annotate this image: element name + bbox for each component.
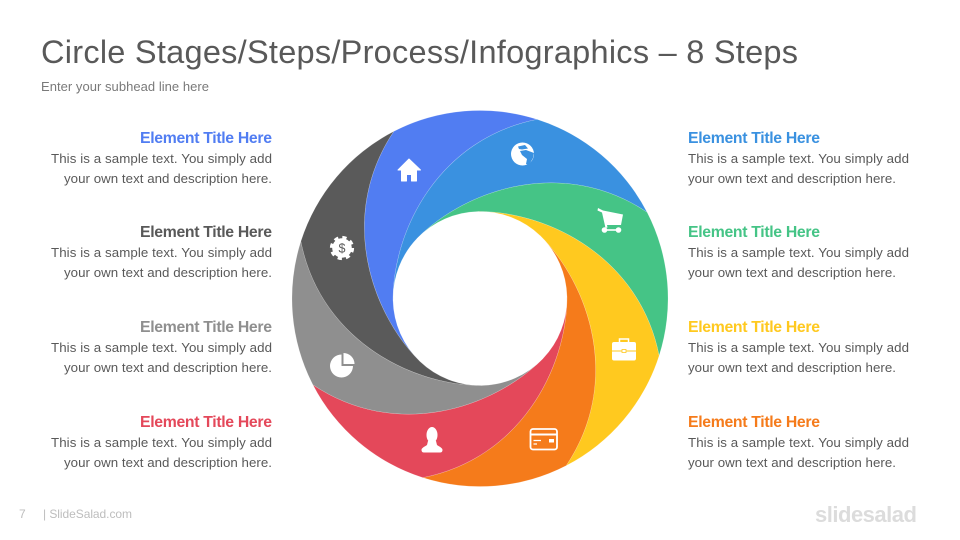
right item 1: your own text and description here. — [688, 171, 896, 186]
segment: gray — [292, 241, 543, 414]
icon: gear with dollar — [332, 238, 352, 258]
left item 1: This is a sample text. You simply add — [51, 151, 272, 166]
left item 3: This is a sample text. You simply add — [51, 340, 272, 355]
left item 1: Element Title Here — [140, 130, 272, 147]
segment: blue — [364, 110, 537, 361]
segment: green — [417, 183, 668, 356]
segment: light blue — [354, 84, 653, 383]
right item 3 — [688, 319, 909, 375]
icon: shopping cart — [598, 208, 623, 233]
left item 2: your own text and description here. — [64, 265, 272, 280]
left item 4: your own text and description here. — [64, 455, 272, 470]
icon: pie chart — [330, 353, 354, 378]
subhead: Enter your subhead line here — [41, 79, 209, 94]
right item 2: Element Title Here — [688, 224, 820, 241]
left item 4: This is a sample text. You simply add — [51, 435, 272, 450]
right item 1 — [688, 130, 909, 186]
page number: 7 — [19, 507, 26, 521]
right item 1: Element Title Here — [688, 130, 820, 147]
right item 3: This is a sample text. You simply add — [688, 340, 909, 355]
segment: red — [307, 214, 606, 513]
left item 1 — [51, 130, 272, 186]
left item 2: Element Title Here — [140, 224, 272, 241]
left item 3 — [51, 319, 272, 375]
title: Circle Stages/Steps/Process/Infographics – 8 Steps — [41, 34, 798, 70]
left item 4: Element Title Here — [140, 414, 272, 431]
segment: dark gray — [265, 125, 565, 425]
icon: gear with dollar: $ — [339, 242, 346, 256]
left item 4 — [51, 414, 272, 470]
icon: briefcase — [612, 339, 636, 360]
right item 2 — [688, 224, 909, 280]
segment: yellow — [395, 172, 695, 472]
circular diagram — [265, 84, 695, 513]
right item 4: This is a sample text. You simply add — [688, 435, 909, 450]
right item 3: your own text and description here. — [688, 360, 896, 375]
icon: user — [422, 427, 442, 452]
segment: orange — [423, 236, 596, 487]
left item 3: your own text and description here. — [64, 360, 272, 375]
right item 2: This is a sample text. You simply add — [688, 245, 909, 260]
right item 2: your own text and description here. — [688, 265, 896, 280]
right item 1: This is a sample text. You simply add — [688, 151, 909, 166]
right item 4: your own text and description here. — [688, 455, 896, 470]
right item 3: Element Title Here — [688, 319, 820, 336]
left item 1: your own text and description here. — [64, 171, 272, 186]
right item 4 — [688, 414, 909, 470]
icon: home — [398, 159, 420, 181]
left item 2: This is a sample text. You simply add — [51, 245, 272, 260]
left item 2 — [51, 224, 272, 280]
logo: slidesalad — [815, 502, 917, 527]
icon: globe — [511, 142, 534, 166]
icon: credit card — [530, 429, 557, 450]
footer source: | SlideSalad.com — [43, 507, 132, 521]
left item 3: Element Title Here — [140, 319, 272, 336]
right item 4: Element Title Here — [688, 414, 820, 431]
